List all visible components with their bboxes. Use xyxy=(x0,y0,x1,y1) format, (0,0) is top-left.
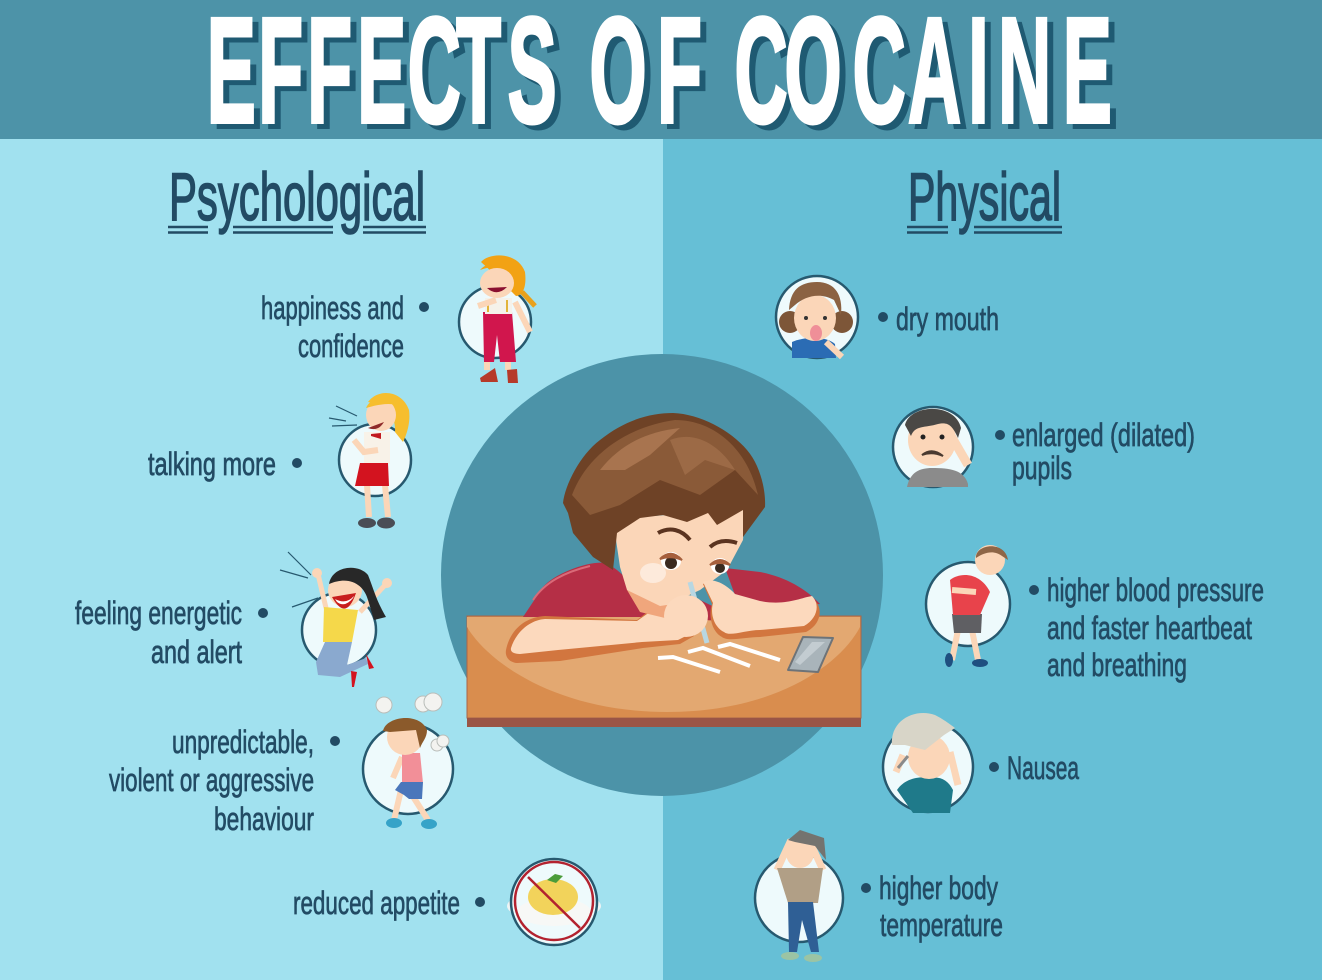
central circle xyxy=(441,354,883,796)
item: nausea xyxy=(883,713,1079,813)
title banner xyxy=(0,0,1322,160)
item: feeling energetic and alert: and alert xyxy=(151,634,242,670)
heading: Physical xyxy=(907,159,1062,235)
panel: physical background xyxy=(663,139,1322,980)
item: higher body temperature xyxy=(755,830,1003,962)
item: enlarged pupils xyxy=(893,407,1195,487)
item: reduced appetite xyxy=(293,859,601,945)
item: enlarged pupils: pupils xyxy=(1012,450,1072,486)
heading: Psychological xyxy=(168,159,426,235)
item: dry mouth: dry mouth xyxy=(896,301,999,337)
item: enlarged pupils: enlarged (dilated) xyxy=(1012,417,1195,453)
heading: Psychological: Psychological xyxy=(169,159,425,235)
item: unpredictable, violent or aggressive behaviour: unpredictable, xyxy=(172,724,314,760)
item: unpredictable, violent or aggressive behaviour: behaviour xyxy=(214,801,314,837)
item: higher blood pressure xyxy=(926,545,1264,683)
heading: Physical: Physical xyxy=(908,159,1061,235)
item: unpredictable, violent or aggressive behaviour: violent or aggressive xyxy=(109,762,314,798)
item: happiness and confidence xyxy=(261,255,535,383)
item: nausea: Nausea xyxy=(1007,750,1079,786)
item: happiness and confidence: confidence xyxy=(298,328,404,364)
panel: psychological background xyxy=(0,139,663,980)
item: higher blood pressure: and breathing xyxy=(1047,647,1187,683)
item: talking more xyxy=(148,393,411,528)
item: higher body temperature: temperature xyxy=(880,907,1003,943)
item: higher body temperature: higher body xyxy=(879,870,998,906)
item: feeling energetic and alert: feeling energetic xyxy=(75,595,242,631)
central illustration: boy at table xyxy=(467,413,861,727)
item: dry mouth xyxy=(776,276,999,358)
item: talking more: talking more xyxy=(148,446,276,482)
item: feeling energetic and alert xyxy=(75,552,392,687)
item: happiness and confidence: happiness and xyxy=(261,290,404,326)
item: reduced appetite: reduced appetite xyxy=(293,885,460,921)
item: unpredictable, violent or aggressive behaviour xyxy=(109,693,453,837)
